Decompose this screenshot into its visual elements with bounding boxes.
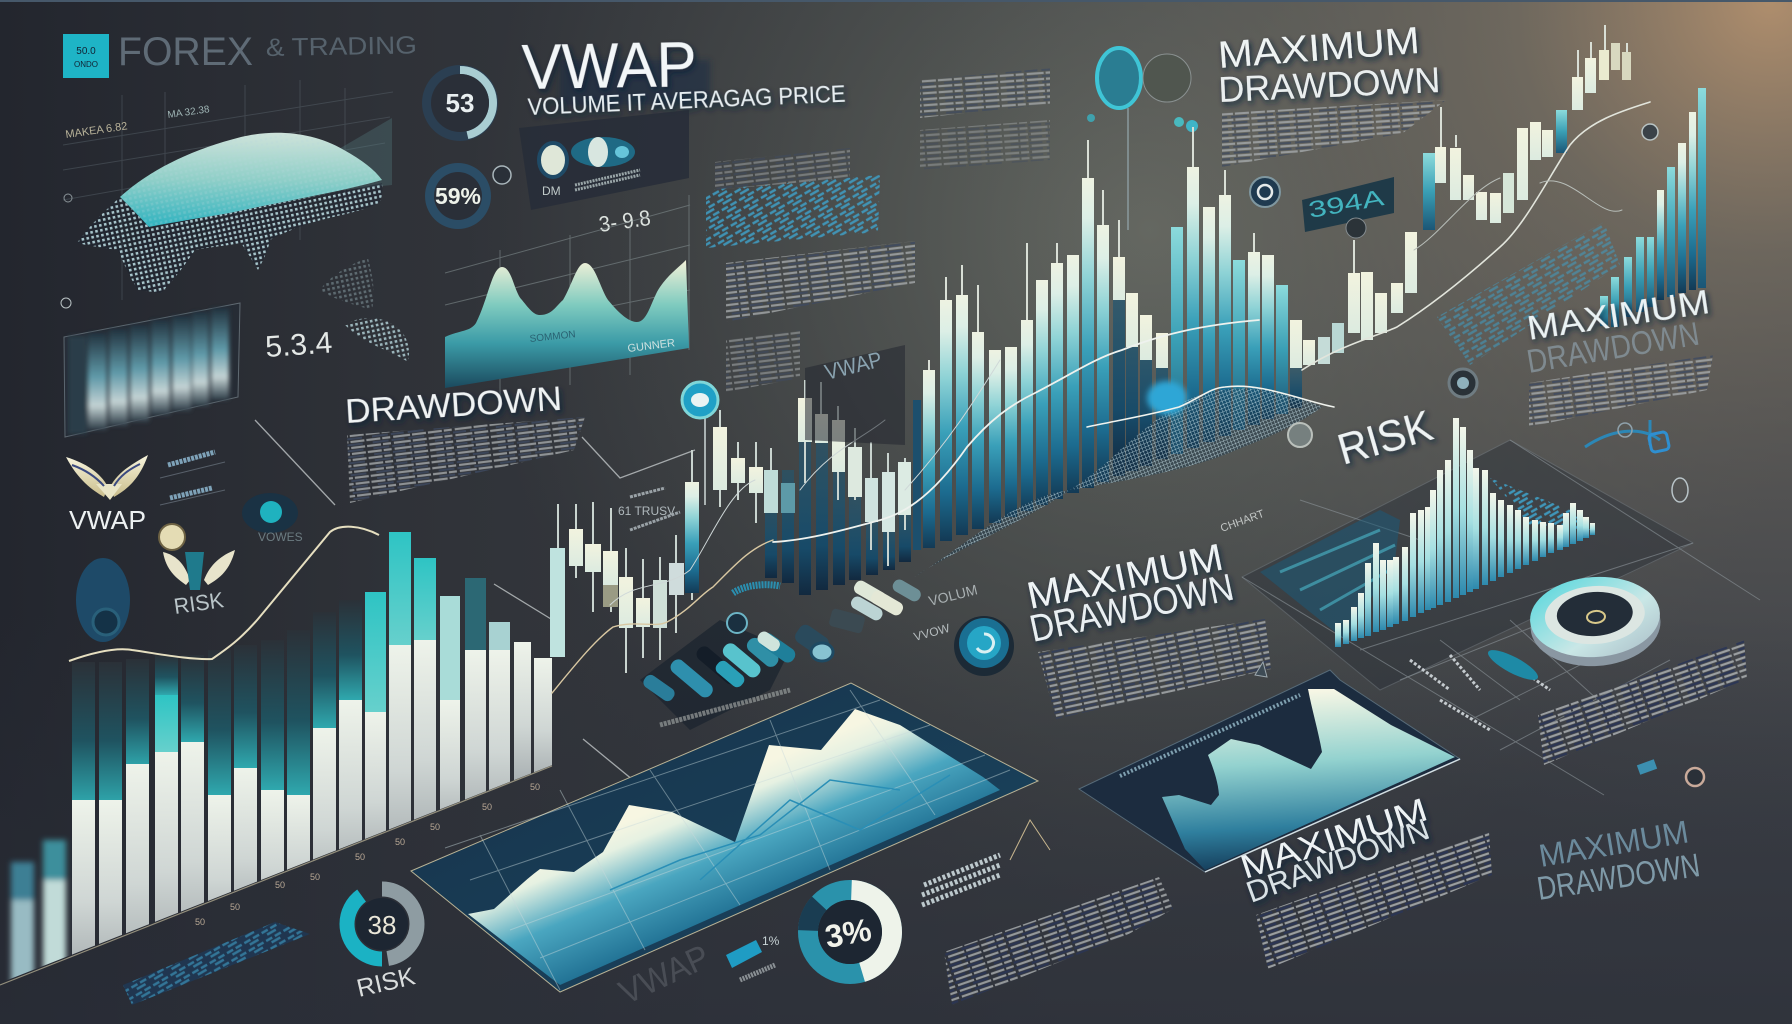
text block: upper caption — [715, 148, 850, 190]
icon: target and stat tag — [1250, 177, 1394, 238]
icon: gold badge — [159, 524, 185, 550]
gauge: 59% — [425, 163, 491, 229]
chart: teal area — [445, 195, 690, 400]
heading: mid maximum drawdown: DRAWDOWN — [1026, 567, 1237, 651]
heading: top maximum drawdown — [1217, 20, 1441, 110]
icon: metallic coin — [1288, 423, 1312, 447]
chart axis and labels: 50 — [195, 917, 205, 927]
heading: top maximum drawdown: DRAWDOWN — [1218, 59, 1441, 110]
stat: 9.8: 3- 9.8 — [597, 205, 652, 237]
icon: blue shield keys — [792, 608, 866, 661]
heading: VWAP: VWAP — [521, 28, 697, 103]
panel: risk dashboard: CHHART — [1219, 508, 1266, 535]
chart axis and labels — [0, 766, 552, 985]
glow: blue orb — [1147, 381, 1187, 415]
icon: teal lens with stem — [1087, 48, 1198, 230]
text block: right description — [1529, 355, 1713, 427]
icon: ring node — [1449, 369, 1477, 397]
text block: top drawdown description — [1222, 100, 1446, 167]
panel: thumbnails — [519, 110, 689, 210]
chart: right rising bars — [1600, 88, 1706, 327]
heading: top maximum drawdown: MAXIMUM — [1217, 20, 1421, 77]
label: small stat captions: 61 TRUSV — [618, 504, 675, 518]
candles: rear dark blue columns — [765, 400, 921, 595]
chart: vertical bars panel — [64, 303, 240, 437]
control pad: cream keys — [849, 577, 923, 623]
label: VWAP small: VWAP — [69, 505, 146, 535]
text block: lower middle description — [944, 877, 1173, 1005]
heading: right maximum drawdown — [1524, 283, 1712, 380]
ribbon: wire mesh wave — [914, 389, 1322, 577]
heading: right maximum drawdown: MAXIMUM — [1525, 283, 1712, 348]
icon: lower wing logo — [163, 550, 235, 590]
chart: mountain panel — [411, 683, 1038, 992]
header: logo and brand — [63, 30, 417, 78]
label: risk small: RISK — [172, 587, 226, 619]
heading: risk: RISK — [1332, 401, 1438, 475]
text block: blue glitch panel — [1437, 222, 1620, 365]
chart: dotted world map — [61, 80, 409, 362]
label: small VWAP mid: VVOW — [912, 621, 952, 644]
icon: small badge — [493, 166, 511, 184]
label: small stat captions — [618, 488, 680, 530]
chart: dotted world map: MAKEA 6.82 — [65, 120, 128, 141]
chart axis and labels: 50 — [230, 902, 240, 912]
brand name suffix: & TRADING — [266, 31, 417, 62]
chart axis and labels: 50 — [395, 837, 405, 847]
icon: small blue tag: 1% — [762, 934, 780, 948]
label: risk bottom: RISK — [354, 962, 418, 1003]
gauge: 38 — [347, 889, 417, 959]
chart axis and labels: 50 — [275, 880, 285, 890]
text block: glitch cyan label — [706, 175, 880, 248]
gauge: 59%: 59% — [435, 183, 481, 209]
arrows: thin pointer lines — [255, 420, 695, 812]
chart: dotted world map: MA 32.38 — [167, 104, 211, 121]
icon: ring dial — [1527, 573, 1663, 670]
heading: bottom maximum drawdown: MAXIMUM — [1236, 791, 1432, 886]
heading: dim maximum drawdown: DRAWDOWN — [1535, 846, 1702, 907]
panel: risk dashboard — [1219, 440, 1760, 795]
text block: small caption — [726, 330, 800, 392]
label: VWAP dark inset — [805, 345, 905, 445]
heading: dim maximum drawdown — [1535, 813, 1702, 907]
label: small mid right tag: VOLUM — [927, 581, 979, 609]
text block: mid description — [1038, 619, 1271, 719]
icon: teal pin — [682, 382, 718, 505]
text block: bottom description — [1256, 832, 1492, 969]
gauge: 53 — [422, 65, 498, 141]
gauge: 3%: 3% — [822, 911, 874, 955]
icon: small ring — [1642, 124, 1658, 140]
gauge: 53: 53 — [446, 88, 474, 118]
text block: right lower description — [1538, 640, 1747, 765]
text block: lower left glitch — [123, 922, 310, 1005]
icon: teal medallion: VOWES — [258, 530, 303, 544]
icon: VWAP wing logo — [66, 455, 148, 500]
trend lines: main chart — [552, 102, 1650, 693]
candles: lower left small — [550, 380, 911, 673]
chart axis and labels: 50 — [355, 852, 365, 862]
icon: small triangle marker — [1255, 662, 1267, 677]
trend line: left chart — [69, 527, 379, 661]
icon: logo square — [63, 34, 109, 78]
text block: drawdown description — [347, 417, 585, 503]
gauge: 3% — [807, 889, 893, 975]
chart axis and labels: 50 — [482, 802, 492, 812]
icon: dim ring — [1637, 759, 1704, 786]
chart: teal area: GUNNER — [627, 337, 676, 355]
heading: dim maximum drawdown: MAXIMUM — [1536, 813, 1691, 874]
chart: large left bars — [11, 532, 552, 1000]
icon group: right cluster — [1585, 420, 1688, 502]
heading: drawdown: DRAWDOWN — [344, 380, 563, 431]
heading: bottom maximum drawdown: DRAWDOWN — [1242, 813, 1434, 910]
chart: main candlestick rally — [550, 25, 1631, 673]
icon: logo square: 50.0 — [76, 46, 96, 57]
control pad: teal keys — [640, 585, 798, 730]
heading: mid maximum drawdown: MAXIMUM — [1023, 537, 1227, 618]
icon: blue mask — [76, 558, 130, 642]
brand name: FOREX — [118, 30, 253, 74]
label: VWAP dark inset: VWAP — [822, 347, 884, 385]
chart: risk spike bars — [1335, 418, 1595, 647]
gauge: 38: 38 — [368, 910, 396, 940]
chart: teal area: SOMMON — [529, 329, 576, 345]
text block: VWAP description — [726, 241, 915, 322]
subheading: volume average price: VOLUME IT AVERAGAG PRICE — [527, 81, 846, 121]
text block: upper centre notes lower — [920, 120, 1050, 170]
icon: small blue tag — [726, 934, 780, 980]
label: VWAP dim: VWAP — [613, 938, 715, 1012]
candles: central tall bars — [923, 25, 1631, 548]
icon: logo square: ONDO — [74, 60, 98, 69]
chart axis and labels: 50 — [430, 822, 440, 832]
panel: thumbnails: DM — [542, 184, 561, 198]
chart: maximum drawdown mountain — [1079, 670, 1460, 872]
text block: small left notes — [160, 452, 225, 505]
stat: 5.3.4: 5.3.4 — [264, 326, 333, 364]
heading: right maximum drawdown: DRAWDOWN — [1524, 315, 1702, 380]
icon: target and stat tag: 394A — [1306, 184, 1387, 223]
chart axis and labels: 50 — [530, 782, 540, 792]
text block: lower middle icons — [922, 820, 1050, 905]
icon: blue dial button — [954, 616, 1014, 676]
text block: upper centre notes — [920, 68, 1050, 118]
icon: teal medallion — [242, 493, 303, 544]
chart axis and labels: 50 — [310, 872, 320, 882]
